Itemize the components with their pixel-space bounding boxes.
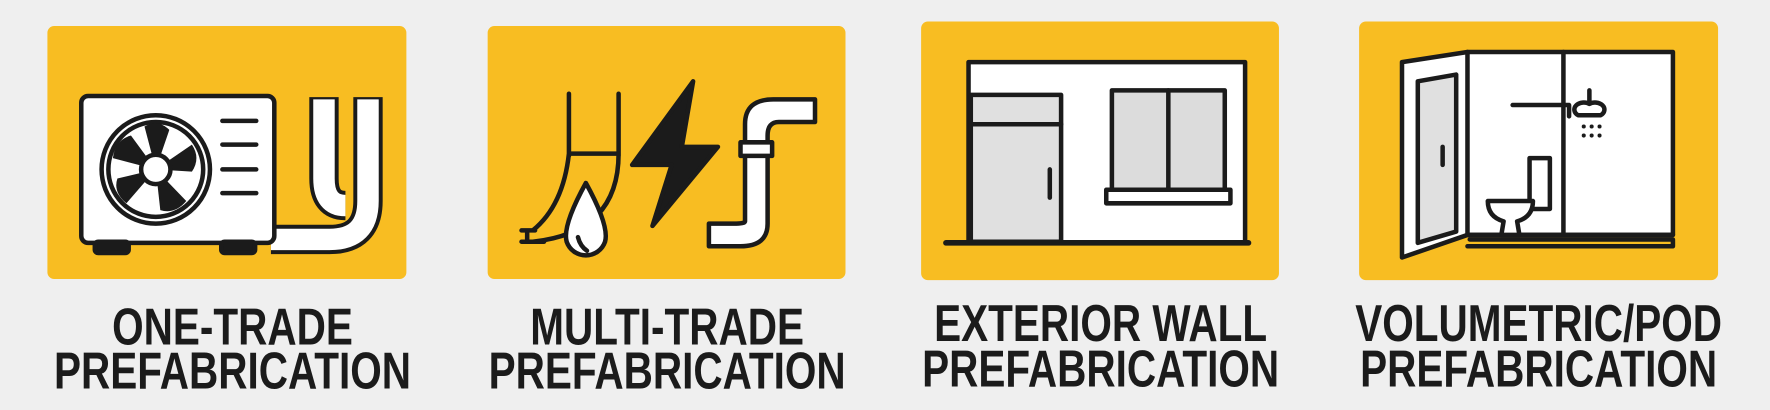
- panel: multi-trade: [488, 26, 845, 279]
- panel: one-trade: [47, 26, 406, 279]
- icon: lightning: [632, 81, 718, 226]
- label: volumetric pod: [1355, 294, 1722, 397]
- label: exterior wall: [922, 294, 1279, 397]
- icon: water drop: [566, 183, 606, 255]
- icon: pipes: [271, 97, 368, 239]
- label: one-trade: [54, 298, 411, 400]
- label: volumetric pod: PREFABRICATION: [1360, 339, 1717, 397]
- label: multi-trade: [489, 298, 846, 400]
- icon: pipe: [709, 99, 815, 246]
- label: multi-trade: PREFABRICATION: [489, 342, 846, 400]
- label: volumetric pod: VOLUMETRIC/POD: [1355, 294, 1722, 352]
- label: one-trade: ONE-TRADE: [112, 298, 353, 356]
- icon: wall with door and window: [946, 62, 1248, 243]
- icon: pod: [1402, 52, 1673, 258]
- label: exterior wall: PREFABRICATION: [922, 339, 1279, 397]
- label: exterior wall: EXTERIOR WALL: [934, 294, 1267, 352]
- icon: AC unit: [81, 96, 274, 253]
- panel: exterior wall: [921, 21, 1279, 280]
- label: multi-trade: MULTI-TRADE: [530, 298, 804, 356]
- label: one-trade: PREFABRICATION: [54, 342, 411, 400]
- panel: volumetric pod: [1359, 21, 1718, 280]
- icon: duct: [522, 94, 619, 242]
